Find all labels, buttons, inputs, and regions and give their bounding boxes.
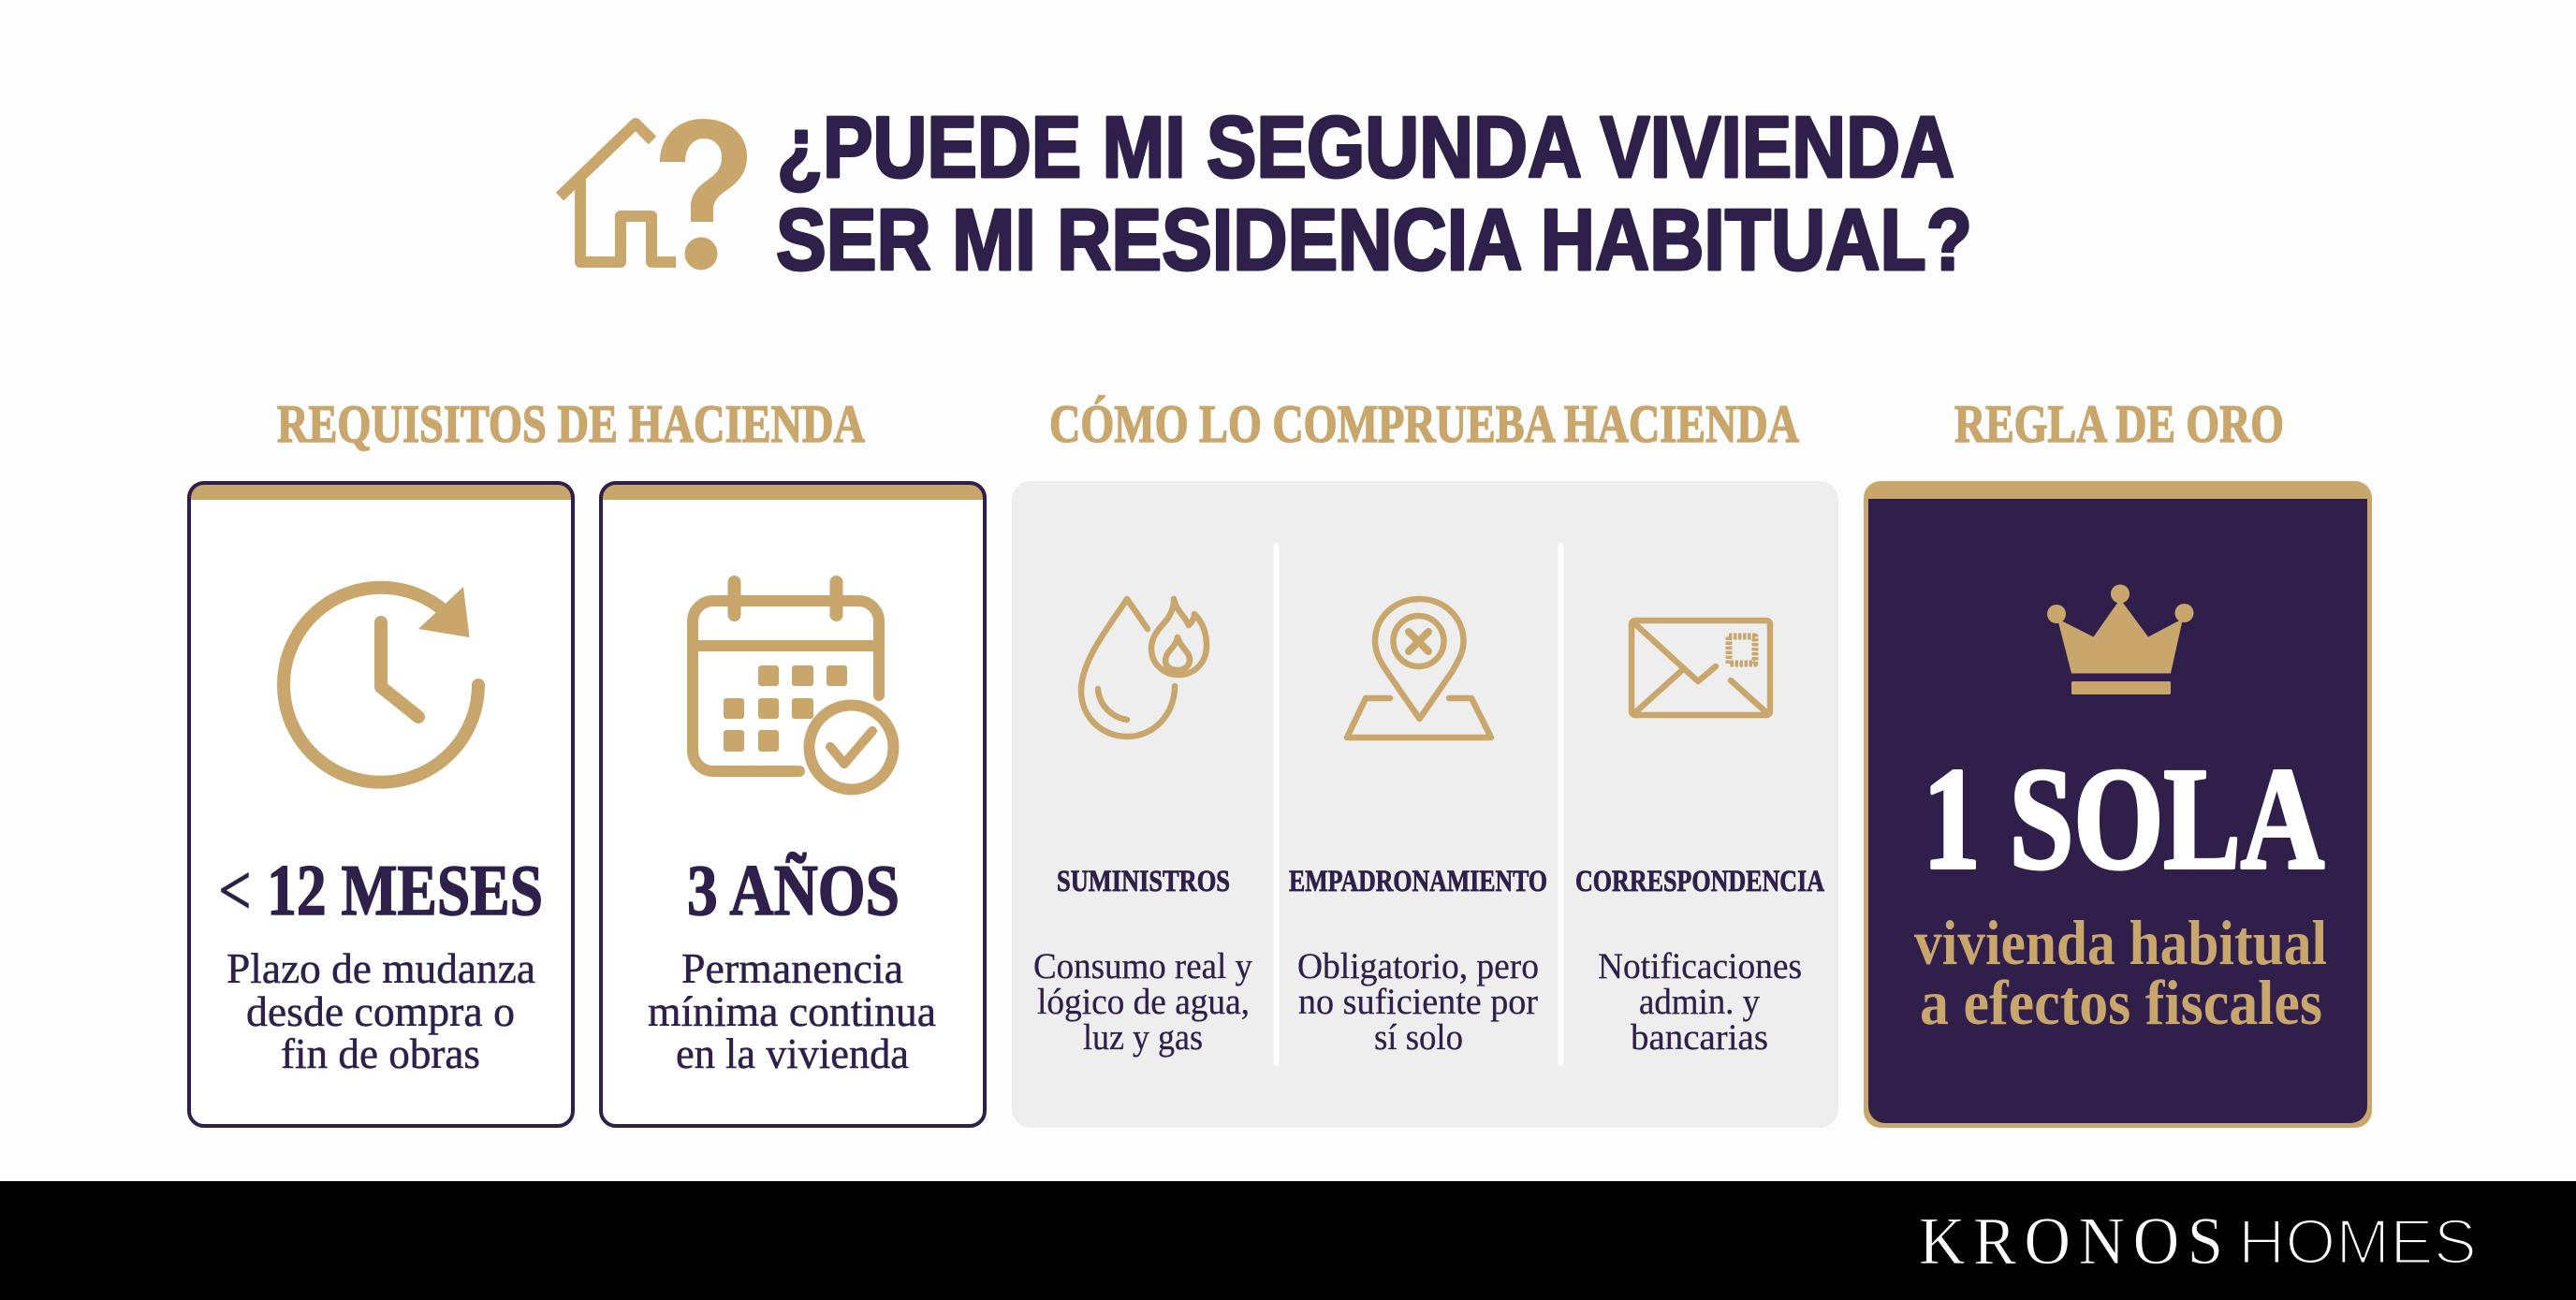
text: permanencia mínima: mínima continua xyxy=(648,987,936,1035)
logo: kronos homes: KRONOS xyxy=(1919,1204,2223,1278)
text: obligatorio xyxy=(1297,946,1539,1058)
text: vivienda habitual a efectos fiscales: vivienda habitual xyxy=(1914,907,2327,978)
text: permanencia mínima: Permanencia xyxy=(681,944,903,992)
icon: envelope with stamp xyxy=(1632,621,1770,715)
text: consumo real: lógico de agua, xyxy=(1037,982,1250,1022)
logo: kronos homes: HOMES xyxy=(2238,1206,2477,1278)
text: notificaciones: admin. y xyxy=(1639,982,1760,1022)
heading: regla de oro: REGLA DE ORO xyxy=(1954,395,2284,454)
text: plazo de mudanza: Plazo de mudanza xyxy=(227,944,535,992)
icon: crown xyxy=(2047,584,2194,694)
text: plazo de mudanza xyxy=(227,944,535,1077)
text: notificaciones xyxy=(1598,946,1802,1058)
text: plazo de mudanza: desde compra o xyxy=(246,987,515,1035)
label: correspondencia: CORRESPONDENCIA xyxy=(1575,865,1824,898)
logo: kronos homes xyxy=(1919,1204,2477,1278)
icon: water drop and flame xyxy=(1081,599,1207,737)
panel: regla de oro xyxy=(1864,481,2372,1128)
icon: calendar with check xyxy=(693,582,893,790)
text: notificaciones: bancarias xyxy=(1631,1017,1768,1058)
stat: 1 sola: 1 SOLA xyxy=(1923,738,2324,899)
text: plazo de mudanza: fin de obras xyxy=(281,1030,480,1077)
footer bar xyxy=(0,1181,2576,1300)
text: notificaciones: Notificaciones xyxy=(1598,946,1802,986)
column: empadronamiento xyxy=(1289,599,1547,1058)
title: SER MI RESIDENCIA HABITUAL? xyxy=(776,191,1972,288)
text: consumo real: luz y gas xyxy=(1083,1017,1203,1058)
text: vivienda habitual a efectos fiscales: a efectos fiscales xyxy=(1920,967,2322,1038)
label: empadronamiento: EMPADRONAMIENTO xyxy=(1289,865,1547,898)
heading: requisitos de hacienda: REQUISITOS DE HACIENDA xyxy=(277,395,865,454)
text: obligatorio: Obligatorio, pero xyxy=(1297,946,1539,986)
column: correspondencia xyxy=(1575,621,1824,1058)
title xyxy=(776,98,1972,288)
text: permanencia mínima xyxy=(648,944,936,1077)
title: ¿PUEDE MI SEGUNDA VIVIENDA xyxy=(777,98,1954,196)
heading: cómo lo comprueba hacienda: CÓMO LO COMPRUEBA HACIENDA xyxy=(1049,395,1799,454)
stat: 3 años: 3 AÑOS xyxy=(687,850,900,930)
text: consumo real: Consumo real y xyxy=(1033,946,1252,986)
text: obligatorio: no suficiente por xyxy=(1298,982,1538,1022)
panel: plazo de mudanza xyxy=(187,481,575,1128)
text: vivienda habitual a efectos fiscales xyxy=(1914,907,2327,1038)
icon: clock with arrow xyxy=(284,587,478,782)
icon: map pin with cross xyxy=(1347,599,1491,738)
panel: permanencia xyxy=(599,481,987,1128)
stat: menos de 12 meses: < 12 MESES xyxy=(218,850,543,930)
text: consumo real xyxy=(1033,946,1252,1058)
label: suministros: SUMINISTROS xyxy=(1057,865,1230,898)
icon: house with question mark xyxy=(560,119,747,270)
text: obligatorio: sí solo xyxy=(1374,1017,1463,1058)
text: permanencia mínima: en la vivienda xyxy=(676,1030,909,1077)
panel: cómo lo comprueba hacienda xyxy=(1012,481,1838,1128)
column: suministros xyxy=(1033,599,1252,1058)
